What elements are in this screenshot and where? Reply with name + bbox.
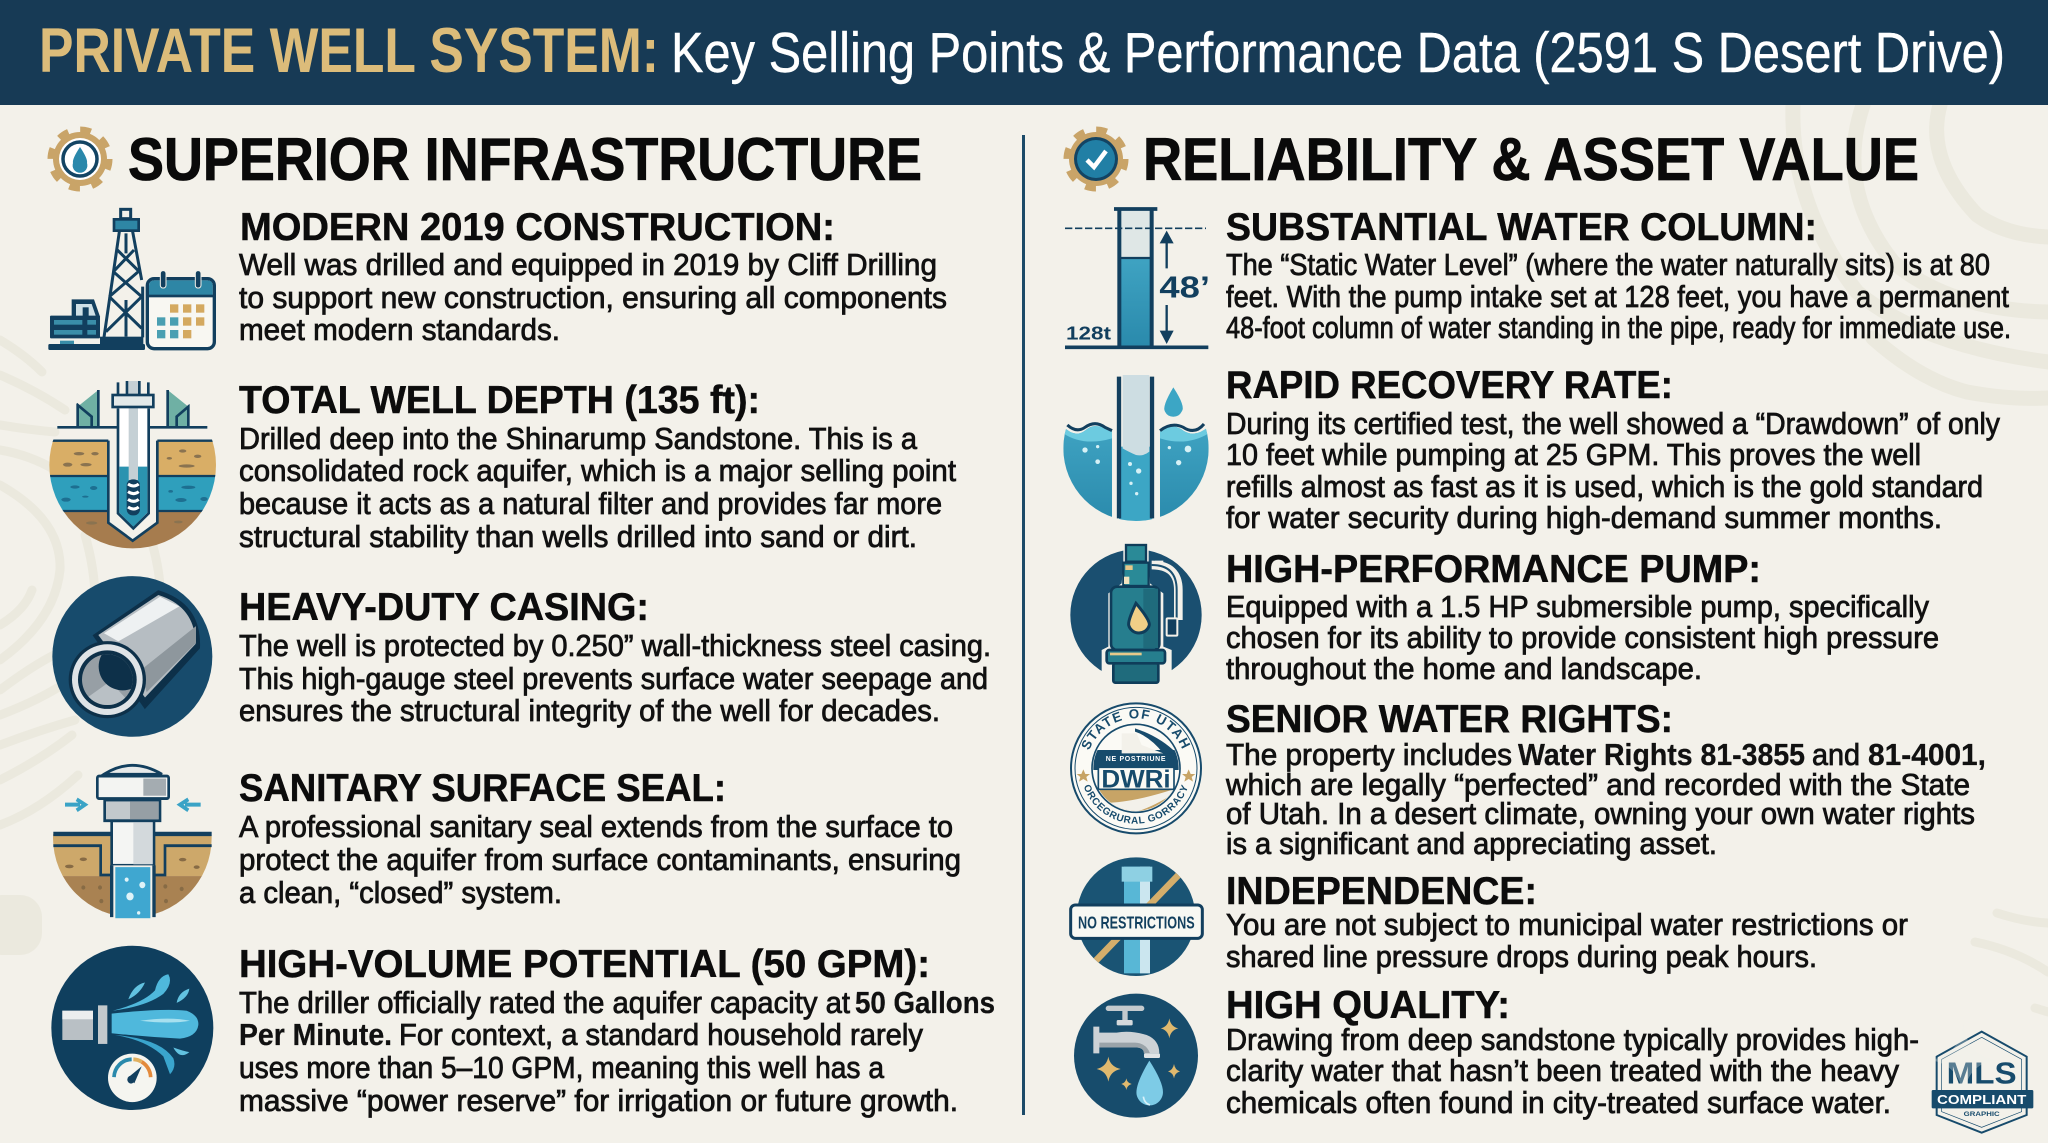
body text: shared line pressure drops during peak hours. bbox=[1226, 940, 1817, 974]
body text: 81-4001, bbox=[1868, 738, 1986, 772]
icon: state of Utah DWRi seal: STATE OF UTAH bbox=[1082, 709, 1190, 750]
item: heavy-duty casing bbox=[52, 576, 991, 737]
icon: submersible pump bbox=[1070, 543, 1202, 684]
body text: consolidated rock aquifer, which is a major selling point bbox=[239, 454, 957, 488]
body text: ensures the structural integrity of the well for decades. bbox=[239, 694, 940, 728]
icon: steel casing pipe bbox=[52, 576, 212, 737]
panel: reliability and asset value bbox=[1063, 126, 2011, 1120]
heading: SENIOR WATER RIGHTS: bbox=[1226, 698, 1673, 741]
icon: no restrictions badge: NO RESTRICTIONS bbox=[1078, 912, 1195, 932]
icon: water jet with gauge bbox=[51, 946, 213, 1110]
heading: TOTAL WELL DEPTH (135 ft): bbox=[239, 379, 760, 422]
body text bbox=[239, 629, 991, 728]
icon: water column diagram: 48’ bbox=[1159, 270, 1210, 304]
heading: INDEPENDENCE: bbox=[1226, 870, 1537, 913]
body text: is a significant and appreciating asset. bbox=[1226, 827, 1717, 861]
icon: state of Utah DWRi seal: DWRi bbox=[1101, 766, 1171, 793]
body text: Drilled deep into the Shinarump Sandstone. This is a bbox=[239, 422, 917, 456]
icon: sanitary seal cap bbox=[50, 765, 217, 919]
section heading: SUPERIOR INFRASTRUCTURE bbox=[128, 126, 922, 193]
header banner bbox=[0, 0, 2048, 105]
body text: The driller officially rated the aquifer capacity at bbox=[239, 986, 850, 1020]
body text: structural stability than wells drilled into sand or dirt. bbox=[239, 520, 917, 554]
body text bbox=[1226, 1023, 1919, 1120]
body text: and bbox=[1812, 738, 1860, 772]
heading: SUBSTANTIAL WATER COLUMN: bbox=[1226, 206, 1817, 249]
item: high-performance pump bbox=[1070, 543, 1939, 686]
body text: You are not subject to municipal water restrictions or bbox=[1226, 908, 1908, 942]
item: independence bbox=[1071, 857, 1908, 976]
body text bbox=[239, 810, 961, 910]
body text bbox=[1226, 908, 1908, 974]
badge: MLS compliant graphic bbox=[1930, 1023, 2033, 1133]
icon: gear with check mark bbox=[1069, 132, 1123, 186]
item: high-volume potential bbox=[51, 943, 995, 1118]
body text: to support new construction, ensuring all components bbox=[239, 281, 947, 315]
heading: MODERN 2019 CONSTRUCTION: bbox=[240, 206, 835, 249]
body text: because it acts as a natural filter and provides far more bbox=[239, 487, 942, 521]
title: gold lead: PRIVATE WELL SYSTEM: bbox=[39, 16, 659, 86]
body text: Well was drilled and equipped in 2019 by Cliff Drilling bbox=[239, 248, 937, 282]
icon: faucet with water drop bbox=[1074, 994, 1198, 1118]
body text: A professional sanitary seal extends from the surface to bbox=[239, 810, 953, 844]
heading: HIGH QUALITY: bbox=[1226, 984, 1510, 1027]
body text: chosen for its ability to provide consistent high pressure bbox=[1226, 621, 1939, 655]
body text: Equipped with a 1.5 HP submersible pump, specifically bbox=[1226, 590, 1930, 624]
body text: clarity water that hasn’t been treated with the heavy bbox=[1226, 1054, 1900, 1088]
icon: gear with water drop bbox=[53, 132, 107, 186]
icon: drilling rig and calendar bbox=[48, 209, 217, 351]
item: substantial water column bbox=[1065, 206, 2011, 347]
heading: HEAVY-DUTY CASING: bbox=[239, 586, 649, 629]
icon: water column diagram bbox=[1065, 209, 1210, 347]
body text bbox=[1225, 738, 1986, 861]
body text bbox=[1226, 590, 1939, 686]
body text: The property includes bbox=[1226, 738, 1512, 772]
body text: refills almost as fast as it is used, which is the gold standard bbox=[1226, 470, 1983, 504]
body text bbox=[239, 422, 957, 554]
body text: meet modern standards. bbox=[239, 313, 560, 347]
body text: of Utah. In a desert climate, owning your own water rights bbox=[1226, 797, 1975, 831]
section heading: RELIABILITY & ASSET VALUE bbox=[1143, 126, 1919, 193]
body text: which are legally “perfected” and recorded with the State bbox=[1225, 768, 1970, 802]
body text: protect the aquifer from surface contaminants, ensuring bbox=[239, 843, 961, 877]
heading: HIGH-VOLUME POTENTIAL (50 GPM): bbox=[239, 943, 930, 986]
panel: superior infrastructure bbox=[47, 126, 995, 1118]
item: sanitary surface seal bbox=[50, 765, 961, 919]
body text: 10 feet while pumping at 25 GPM. This proves the well bbox=[1226, 438, 1921, 472]
icon: water column diagram: 128t bbox=[1066, 322, 1111, 343]
body text bbox=[1226, 407, 2001, 535]
icon: state of Utah DWRi seal: ORCEGRURAL GORRACY bbox=[1084, 784, 1188, 824]
body text: During its certified test, the well showed a “Drawdown” of only bbox=[1226, 407, 2001, 441]
body text: massive “power reserve” for irrigation or future growth. bbox=[239, 1084, 958, 1118]
body text: This high-gauge steel prevents surface water seepage and bbox=[239, 662, 988, 696]
body text: chemicals often found in city-treated surface water. bbox=[1226, 1086, 1891, 1120]
body text bbox=[239, 248, 947, 347]
body text: throughout the home and landscape. bbox=[1226, 652, 1702, 686]
heading: SANITARY SURFACE SEAL: bbox=[239, 767, 726, 810]
body text bbox=[1226, 248, 2011, 345]
icon: well in water bbox=[1063, 375, 1209, 525]
body text: Per Minute. bbox=[239, 1018, 392, 1052]
badge: MLS compliant graphic: MLS bbox=[1947, 1056, 2017, 1090]
badge: MLS compliant graphic: COMPLIANT bbox=[1937, 1092, 2026, 1107]
item: high quality bbox=[1074, 984, 1919, 1120]
heading: HIGH-PERFORMANCE PUMP: bbox=[1226, 548, 1761, 591]
icon: state of Utah DWRi seal: NE POSTRIUNE bbox=[1106, 756, 1166, 763]
heading: RAPID RECOVERY RATE: bbox=[1226, 364, 1673, 407]
icon: no restrictions badge bbox=[1071, 857, 1202, 976]
body text: 50 Gallons bbox=[855, 986, 995, 1020]
body text: Drawing from deep sandstone typically provides high- bbox=[1226, 1023, 1919, 1057]
item: rapid recovery rate bbox=[1063, 364, 2001, 535]
badge: MLS compliant graphic: GRAPHIC bbox=[1964, 1111, 2000, 1118]
item: modern construction bbox=[48, 206, 947, 351]
body text: Water Rights 81-3855 bbox=[1518, 738, 1805, 772]
icon: state of Utah DWRi seal bbox=[1070, 702, 1202, 834]
body text: For context, a standard household rarely bbox=[399, 1018, 924, 1052]
body text: uses more than 5–10 GPM, meaning this well has a bbox=[239, 1051, 884, 1085]
body text: The well is protected by 0.250” wall-thickness steel casing. bbox=[239, 629, 991, 663]
body text: for water security during high-demand summer months. bbox=[1226, 501, 1942, 535]
item: senior water rights bbox=[1070, 698, 1986, 861]
icon: well cross-section bbox=[47, 381, 220, 550]
column divider bbox=[1022, 135, 1025, 1115]
body text: a clean, “closed” system. bbox=[239, 876, 562, 910]
item: total well depth bbox=[47, 379, 957, 554]
body text bbox=[239, 986, 995, 1118]
